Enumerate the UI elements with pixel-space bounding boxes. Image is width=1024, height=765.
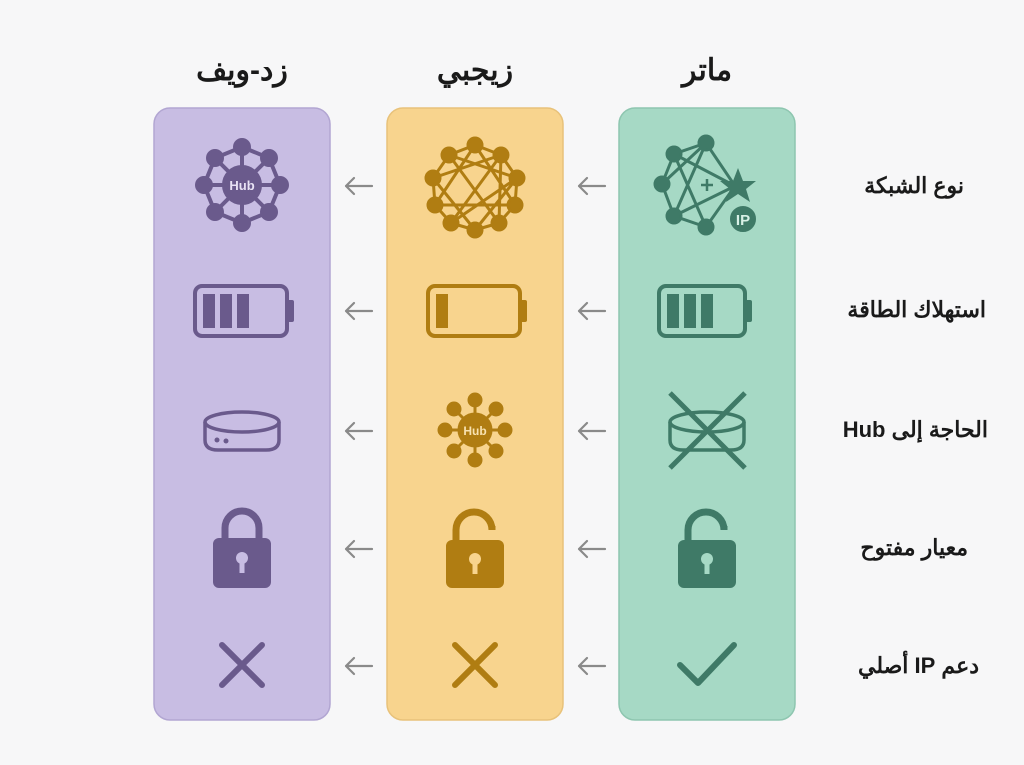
icon: hub device [205, 412, 279, 450]
icon: battery full [195, 286, 294, 336]
icon: hub required: Hub [463, 424, 487, 438]
icon: battery full [659, 286, 752, 336]
icon: cross [222, 645, 262, 685]
label: open standard: معيار مفتوح [860, 535, 968, 560]
icon: no hub [670, 393, 745, 468]
icon: open lock [678, 512, 736, 588]
icon: mesh with IP [655, 136, 757, 234]
arrows [346, 178, 605, 674]
panel: Z-Wave [154, 108, 330, 720]
label: power consumption: استهلاك الطاقة [847, 297, 986, 322]
icon: mesh with IP: IP [736, 212, 750, 229]
icon: hub required [439, 394, 511, 466]
icon: check [680, 645, 734, 683]
icon: cross [455, 645, 495, 685]
icon: hub star network [197, 140, 287, 230]
panel: Zigbee [387, 108, 563, 720]
icon: hub star network: Hub [229, 178, 255, 193]
label: network type: نوع الشبكة [864, 173, 964, 198]
heading: Zigbee: زيجبي [437, 54, 513, 88]
row labels [843, 173, 988, 679]
heading: Z-Wave: زد-ويف [196, 54, 288, 88]
panel: Matter [619, 108, 795, 720]
icon: battery low [428, 286, 527, 336]
label: native IP: دعم IP أصلي [858, 653, 979, 678]
icon: mesh network [426, 138, 524, 237]
heading: Matter: ماتر [680, 54, 732, 88]
label: hub need: الحاجة إلى Hub [843, 417, 988, 442]
icon: open lock [446, 512, 504, 588]
icon: closed lock [213, 511, 271, 588]
